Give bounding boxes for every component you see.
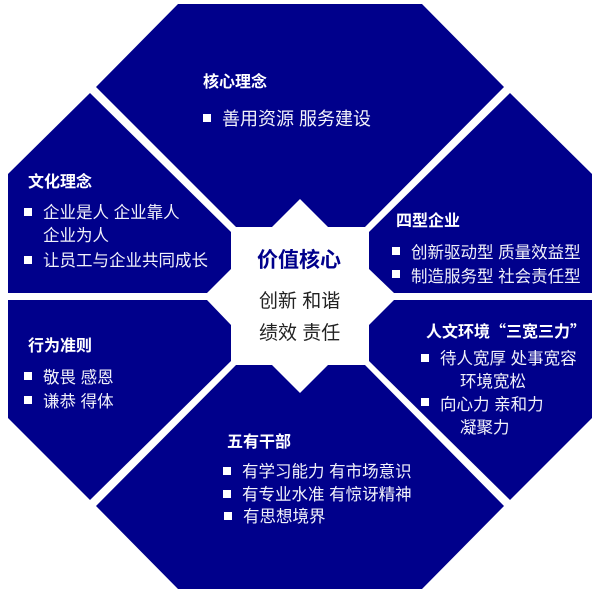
text block: humanistic environment [421,318,586,436]
text block: five qualities of cadres [223,433,412,526]
bullet [24,208,32,216]
bullet item three: 有思想境界 [243,508,326,526]
text block: four enterprise types [392,212,581,286]
panel: lower right [369,300,592,500]
heading: code of conduct: 行为准则 [28,338,92,355]
heading: culture philosophy: 文化理念 [28,174,92,191]
bullet item two: 有专业水准 有惊讶精神 [242,486,412,504]
bullet item one [43,204,180,245]
bullet [392,247,400,255]
bullet item one [440,350,577,390]
bullet item two: 制造服务型 社会责任型 [411,268,581,286]
bullet [223,467,231,475]
center line one: 创新 和谐 [259,291,340,312]
center heading: 价值核心 [257,249,341,272]
panel: upper right [369,93,592,293]
center text [257,248,341,344]
bullet [224,512,232,520]
bullet item one: 有学习能力 有市场意识 [242,463,412,481]
bullet item one: 敬畏 感恩 [43,369,114,387]
bullet items: 创新驱动型 质量效益型 [411,244,581,262]
bullet item two: 让员工与企业共同成长 [43,252,208,270]
text block: culture philosophy [24,173,208,270]
bullet item two: 谦恭 得体 [43,393,114,411]
bullet [421,398,429,406]
panel: lower left [8,300,231,500]
text block: core philosophy [203,73,371,129]
panel: top [96,4,504,227]
bullet item two [440,396,544,436]
bullet item one: 待人宽厚 处事宽容 [440,350,577,368]
heading: humanistic environment: 人文环境“三宽三力” [426,318,586,342]
bullet item one: 企业是人 企业靠人 [43,204,180,222]
bullet item one: 环境宽松 [460,372,526,390]
bullet [421,354,429,362]
bullet item two: 向心力 亲和力 [440,396,544,414]
heading: five qualities of cadres: 五有干部 [227,434,291,451]
bullet [203,114,211,122]
panel: bottom [96,365,504,589]
bullet [24,256,32,264]
center line two: 绩效 责任 [259,323,340,344]
bullet [223,490,231,498]
heading: four enterprise types: 四型企业 [396,213,460,230]
text block: code of conduct [24,337,114,411]
bullet item: 善用资源 服务建设 [222,109,371,129]
bullet item one: 企业为人 [43,227,109,245]
bullet item two: 凝聚力 [460,418,510,436]
heading: core philosophy: 核心理念 [203,74,267,91]
bullet [392,270,400,278]
bullet [24,372,32,380]
panel: upper left [8,93,231,293]
bullet [24,396,32,404]
